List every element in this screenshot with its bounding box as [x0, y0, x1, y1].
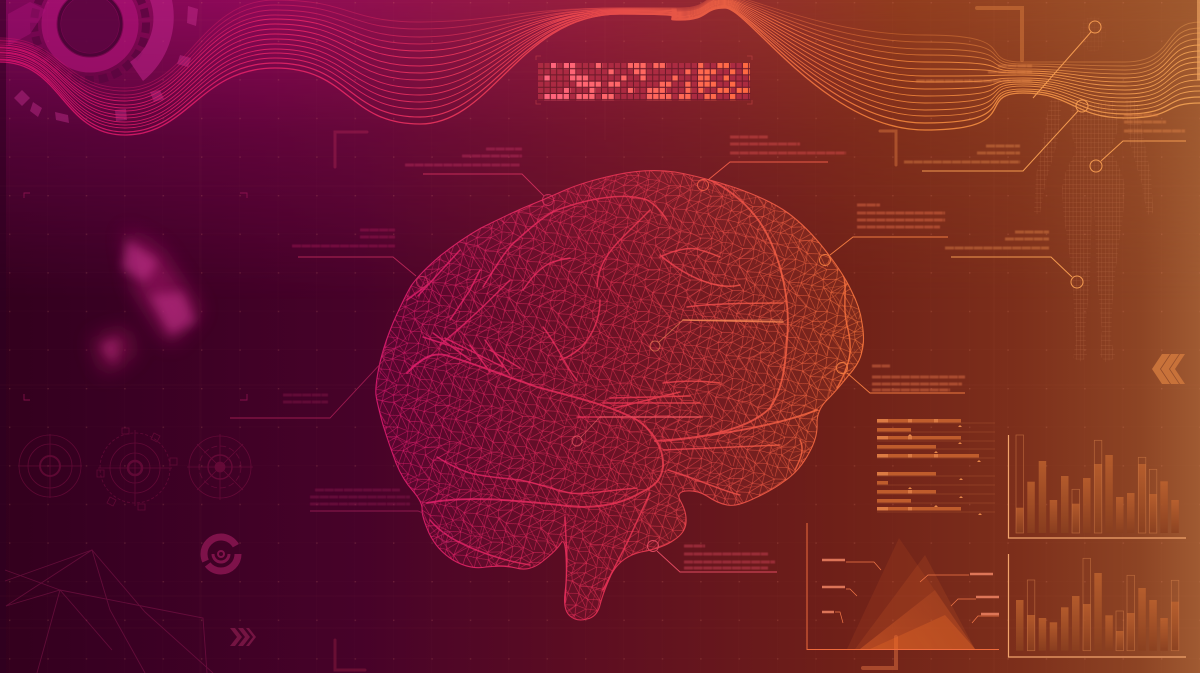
chart axes	[1008, 435, 1186, 538]
bar chart: bottom	[1008, 554, 1186, 657]
horizontal progress bars	[877, 419, 995, 515]
chart axes	[1008, 554, 1186, 657]
pixel block display	[536, 56, 752, 104]
brain outline	[376, 171, 864, 620]
human body wireframe	[1034, 16, 1153, 362]
left panel: corner frame with pink blob	[24, 193, 247, 400]
icon: top-left gear dial	[8, 0, 198, 123]
icon: left-pointing chevrons	[1152, 354, 1185, 384]
chart axes	[807, 523, 999, 650]
icon: circular target	[204, 537, 238, 571]
brain sulci folds	[407, 177, 850, 603]
mountain area chart	[807, 523, 999, 650]
icons: three radial gauges	[18, 428, 253, 510]
brackets: corner frames	[335, 8, 1022, 670]
wireframe brain	[375, 170, 864, 620]
callouts on the human body	[904, 21, 1186, 288]
brain base tint	[376, 171, 864, 620]
callout leaders on the brain	[230, 162, 965, 572]
pseudo text bars beside callouts	[283, 137, 965, 568]
bar chart: top	[1008, 435, 1186, 538]
brain triangular mesh	[376, 170, 863, 620]
icon: right-pointing chevrons	[230, 628, 256, 646]
wave lines across the top	[0, 0, 1200, 135]
wireframe pyramid lines	[5, 550, 213, 673]
